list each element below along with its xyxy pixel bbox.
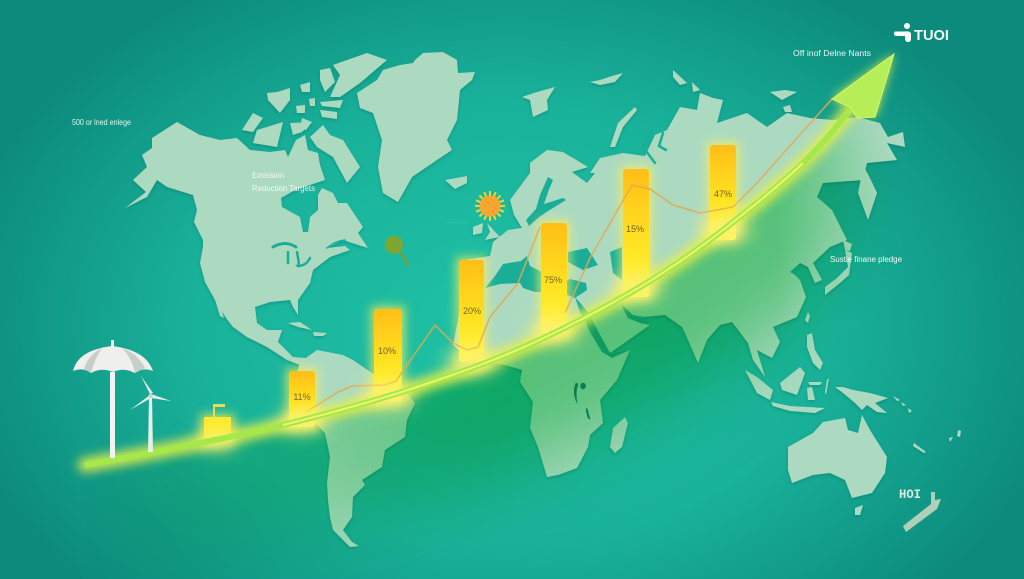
uk and ireland [473,223,500,240]
label: finance pledge top left: 500 or lned enlege [72,118,131,127]
wind turbine icon [130,376,171,452]
landmasses [125,52,961,547]
south america [293,350,415,547]
small grey arrow [903,492,941,532]
bar 20%: 20% [463,306,481,316]
bar chart [204,145,736,441]
iceland [445,176,467,189]
logo [894,23,949,44]
bar 15% [623,169,649,297]
japan [825,240,852,295]
sakhalin [858,165,877,220]
inland seas and lakes [273,130,800,419]
bar 47%: 47% [714,189,732,199]
bar 15%: 15% [626,224,644,234]
hot spots where bars meet the arrow [197,219,750,449]
label: finance pledge right: Sustie finane pledge [830,255,903,264]
east african lakes [574,383,590,419]
bar 47% [710,145,736,240]
green shaded wedge below the arrow [85,110,850,465]
bar 75%: 75% [544,275,562,285]
label: emission reduction targets [252,171,315,193]
label: emission reduction targets: Emission [252,171,284,180]
eurasia [462,93,905,377]
madagascar [610,417,628,453]
orange trend line [306,99,832,412]
bar 10% [374,309,402,401]
new guinea [835,387,888,413]
arrowhead [832,54,894,118]
label: top right: Off inof Delne Nants [793,49,871,58]
map pin icon [385,236,409,266]
caribbean islands [288,322,327,336]
logo wordmark: TUOI [914,27,949,44]
arctic islands [242,53,387,183]
glowing rising arrow [85,54,894,465]
australia [788,415,887,498]
arrow shaft [85,110,850,465]
southeast asia islands [745,312,829,413]
umbrella icon [73,340,153,458]
greenland [357,52,475,202]
arrow shaft highlight [283,163,803,425]
world map [125,52,961,547]
bar 11%: 11% [293,392,311,402]
logo mark [894,23,911,42]
arrow glow [85,110,850,465]
sun icon [475,191,505,221]
tasmania [855,505,863,515]
label: HOI: HOI [899,487,921,502]
small scattered label speckle: · · · · · · · · [446,220,467,225]
bar 10%: 10% [378,346,396,356]
bar 75% [541,223,567,333]
baja california [213,293,224,318]
north america [125,122,368,365]
bar 11% [289,371,315,427]
block base with flag [204,404,231,441]
bar glows [200,142,739,444]
pacific islands [893,396,961,453]
arrowhead glow [832,54,894,117]
label: emission reduction targets: Reduction Targets [252,184,315,193]
svalbard [522,87,555,117]
africa [453,280,630,477]
arctic russian islands [590,70,797,147]
bar 20% [459,260,484,362]
